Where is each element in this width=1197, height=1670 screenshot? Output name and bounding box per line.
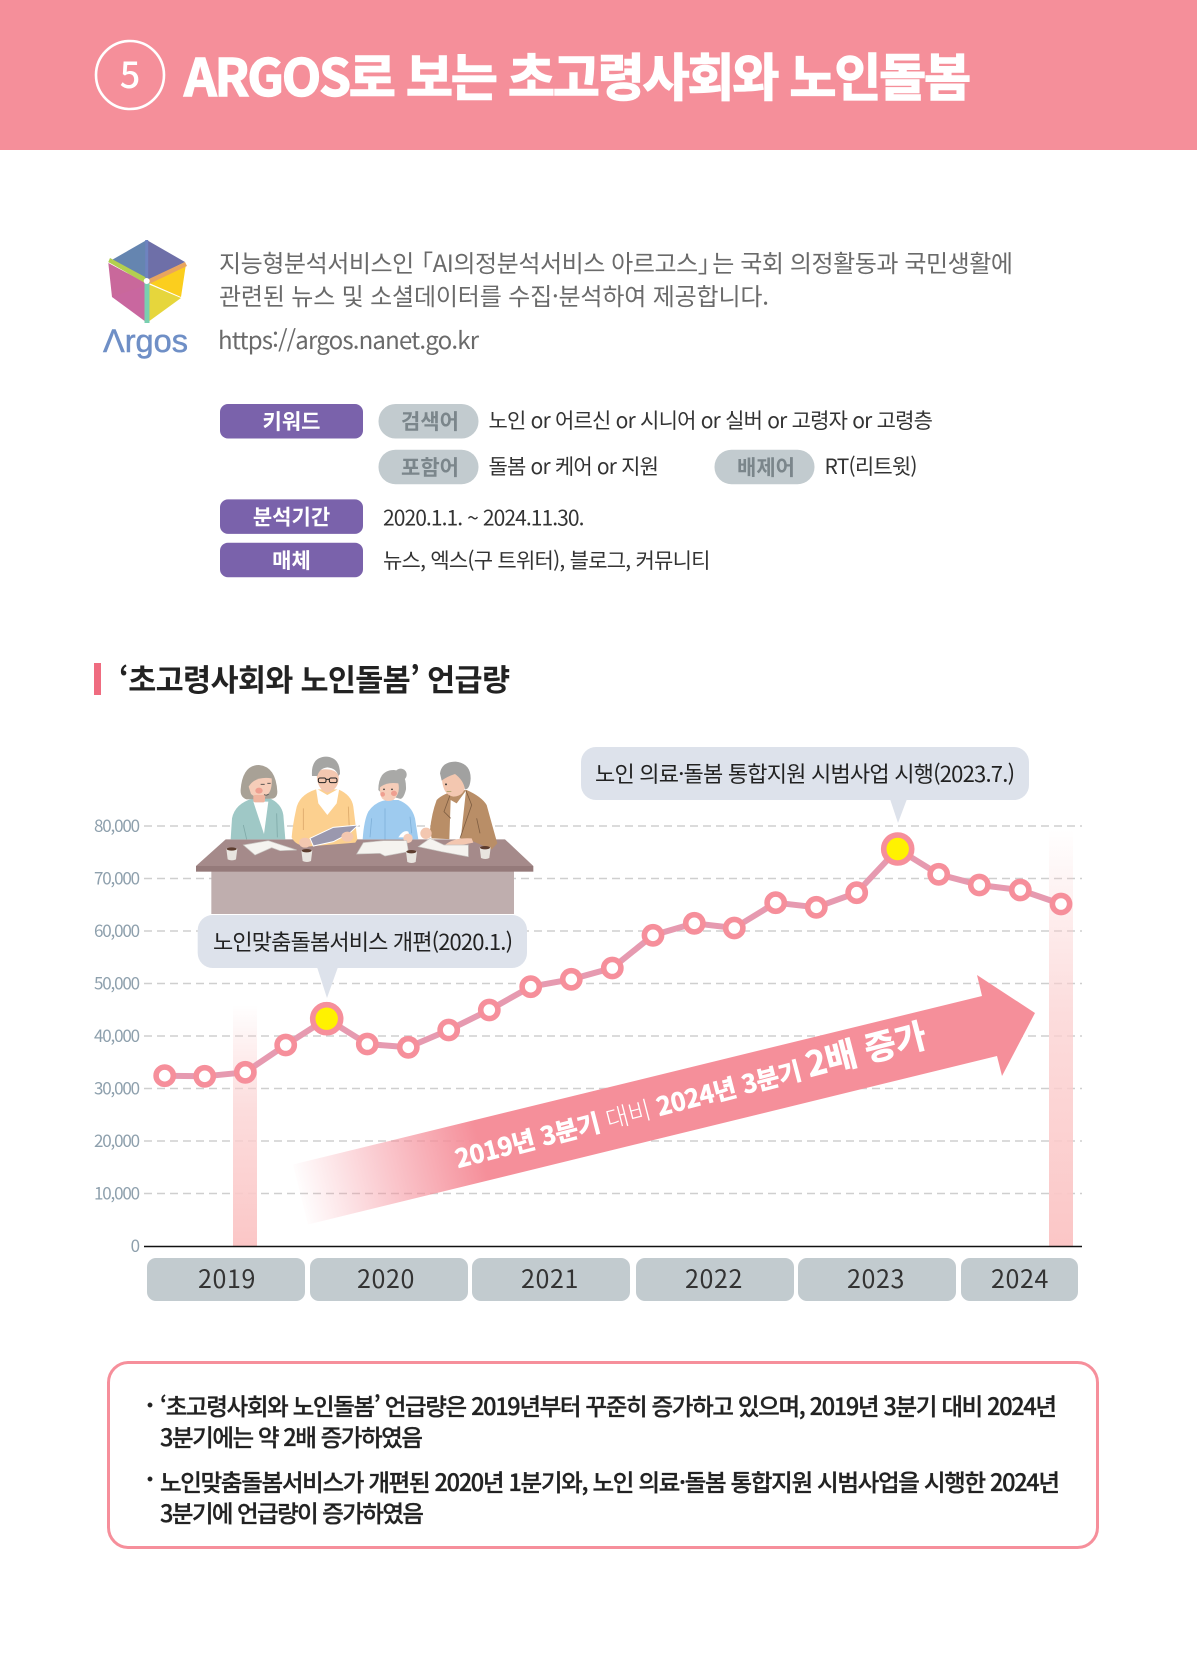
intro text: 지능형분석서비스인 「AI의정분석서비스 아르고스」는 국회 의정활동과 국민생활에	[219, 244, 1013, 279]
year labels: 2024	[991, 1260, 1049, 1296]
arrow caption: 2019년 3분기 대비 2024년 3분기 2배 증가	[448, 1009, 931, 1178]
table	[196, 839, 533, 914]
callout: 2023 pilot program	[581, 747, 1029, 823]
callout: 2020 service reorganization: 노인맞춤돌봄서비스 개편(2020.1.)	[213, 925, 513, 957]
excluded terms text: RT(리트윗)	[824, 451, 918, 481]
y axis labels: 50,000	[94, 970, 140, 994]
label: search terms: 검색어	[401, 406, 459, 436]
label: media: 매체	[272, 545, 311, 575]
books on the table	[243, 838, 468, 857]
label: keywords: 키워드	[263, 406, 320, 436]
chart heading: ‘초고령사회와 노인돌봄’ 언급량	[119, 656, 510, 700]
bullet two	[148, 1464, 1060, 1529]
label: analysis period: 분석기간	[253, 502, 330, 532]
y axis labels: 60,000	[94, 917, 140, 942]
media text: 뉴스, 엑스(구 트위터), 블로그, 커뮤니티	[383, 545, 710, 575]
bullet one: 3분기에는 약 2배 증가하였음	[160, 1419, 423, 1453]
intro text: 관련된 뉴스 및 소셜데이터를 수집·분석하여 제공합니다.	[219, 277, 769, 312]
label: excluded terms: 배제어	[737, 452, 795, 482]
section number badge: 5	[120, 47, 140, 99]
y axis labels: 30,000	[94, 1074, 140, 1100]
highlight bar: 2024 Q3	[1049, 830, 1073, 1246]
label: excluded terms	[714, 450, 814, 484]
illustration: seniors around a table	[196, 757, 533, 914]
included terms text: 돌봄 or 케어 or 지원	[488, 451, 659, 481]
person: man in brown jacket	[420, 762, 497, 849]
y axis labels: 70,000	[94, 864, 140, 890]
y axis labels: 20,000	[94, 1127, 140, 1152]
label: search terms	[378, 404, 478, 438]
year labels	[147, 1258, 1078, 1301]
person: man in yellow vest with glasses	[292, 757, 358, 848]
y axis labels	[94, 812, 140, 1257]
year labels: 2019	[198, 1260, 256, 1296]
logo wordmark: Λrgos	[103, 323, 188, 359]
highlighted point: 2020 Q1	[313, 1005, 341, 1033]
bullet two: 3분기에 언급량이 증가하였음	[160, 1495, 424, 1529]
intro text: https://argos.nanet.go.kr	[218, 321, 480, 356]
label: analysis period	[220, 499, 363, 534]
person: woman in blue cardigan	[363, 769, 418, 843]
intro text	[218, 244, 1013, 356]
year labels: 2023	[847, 1260, 905, 1296]
coffee cups	[226, 846, 491, 863]
icon: Argos logo	[103, 240, 188, 359]
data points	[156, 866, 1070, 1085]
bullet one: ‘초고령사회와 노인돌봄’ 언급량은 2019년부터 꾸준히 증가하고 있으며, 2019년 3분기 대비 2024년	[160, 1388, 1057, 1422]
year labels: 2022	[685, 1260, 743, 1296]
y axis labels: 40,000	[94, 1022, 140, 1047]
title: ARGOS로 보는 초고령사회와 노인돌봄	[183, 37, 971, 111]
person: woman in teal cardigan	[231, 765, 285, 839]
label: media	[220, 543, 363, 577]
label: included terms: 포함어	[401, 452, 459, 482]
callout: 2023 pilot program: 노인 의료·돌봄 통합지원 시범사업 시행(2023.7.)	[595, 757, 1015, 789]
highlighted point: 2023 Q3	[884, 835, 912, 863]
label: keywords	[220, 404, 363, 438]
bullet one	[148, 1388, 1057, 1453]
y axis labels: 80,000	[94, 812, 140, 837]
keyword and search condition table	[220, 404, 933, 577]
growth arrow	[293, 975, 1035, 1224]
header band	[0, 0, 1197, 150]
year labels: 2020	[357, 1260, 415, 1296]
bullet two: 노인맞춤돌봄서비스가 개편된 2020년 1분기와, 노인 의료·돌봄 통합지원 시범사업을 시행한 2024년	[160, 1464, 1060, 1498]
highlight bar: 2019 Q3	[233, 1005, 257, 1246]
data line	[165, 849, 1061, 1076]
x axis line	[144, 1246, 1082, 1248]
label: included terms	[378, 450, 478, 484]
section number badge	[96, 41, 164, 109]
y axis labels: 0	[131, 1232, 140, 1257]
callout: 2020 service reorganization	[198, 915, 527, 998]
y axis labels: 10,000	[94, 1180, 140, 1204]
year labels: 2021	[521, 1260, 579, 1296]
summary box	[108, 1362, 1098, 1548]
search terms text: 노인 or 어르신 or 시니어 or 실버 or 고령자 or 고령층	[488, 405, 933, 435]
analysis period text: 2020.1.1. ~ 2024.11.30.	[383, 502, 584, 532]
line chart	[94, 812, 1082, 1301]
